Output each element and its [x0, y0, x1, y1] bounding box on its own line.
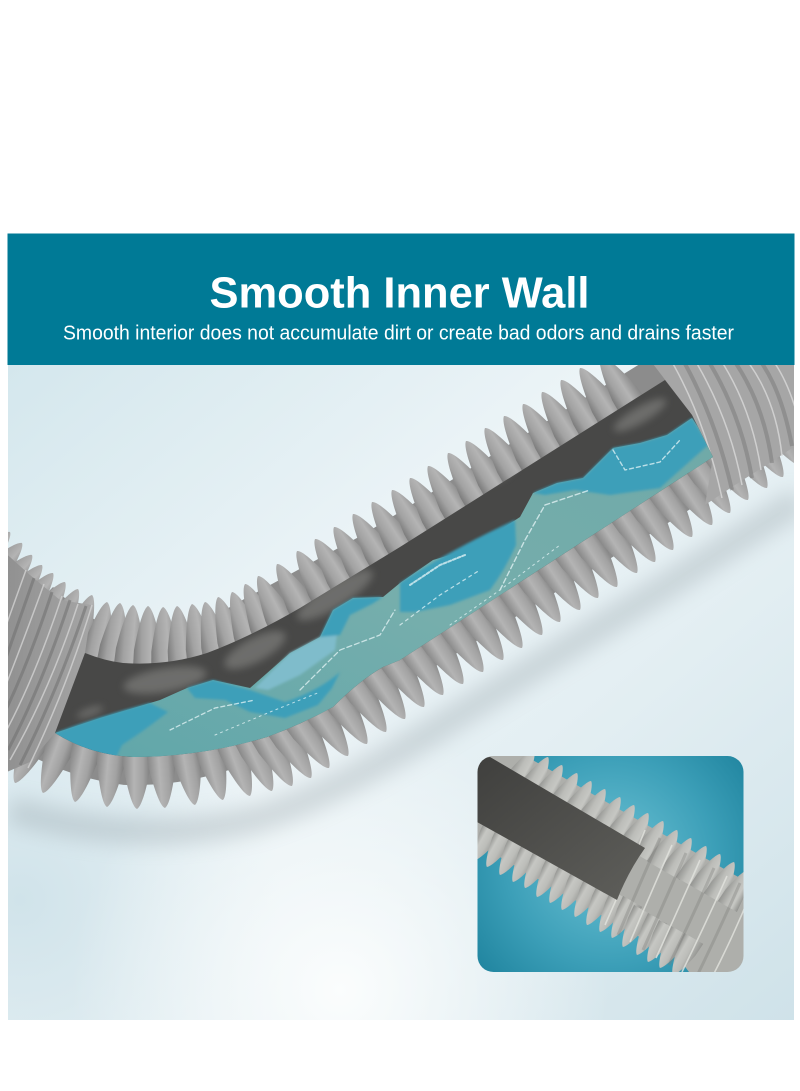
illustration: corrugated drain hose cross-section: [0, 348, 800, 831]
inset sleeve ridges: [604, 830, 744, 972]
inset dark channel: [470, 757, 645, 900]
blue wave crests: [55, 418, 708, 760]
inset bottom ribs: [478, 825, 703, 972]
inset: close-up of smooth inner wall: [478, 756, 744, 972]
inset top ribs: [511, 756, 744, 912]
white foam streaks: [170, 440, 680, 735]
inner smooth wall channel: [55, 380, 713, 757]
pipe drop shadow: [10, 500, 800, 831]
water flowing inside the channel: [55, 393, 720, 765]
top corrugation ribs: [0, 348, 646, 670]
bottom corrugation ribs: [14, 447, 794, 809]
banner: teal title strip: [8, 234, 794, 365]
pipe body: [0, 355, 800, 710]
inset body: [478, 756, 744, 972]
subtitle: Smooth interior does not accumulate dirt or create bad odors and drains faster: [63, 322, 734, 344]
left outer sleeve: [8, 556, 92, 772]
right outer sleeve: [654, 365, 794, 504]
title: Smooth Inner Wall: [210, 268, 590, 318]
water spray stains on wall: [75, 393, 670, 721]
water body: [55, 418, 720, 765]
panel: light blue background: [8, 365, 794, 1020]
